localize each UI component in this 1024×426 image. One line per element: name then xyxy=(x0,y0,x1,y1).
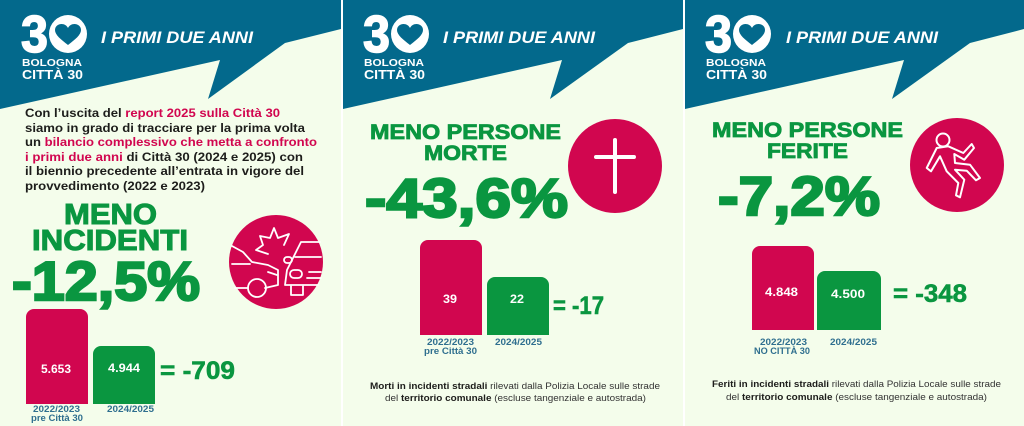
bar chart: 4.848 xyxy=(765,287,799,299)
bar chart: 2022/2023 xyxy=(760,337,807,348)
icon: cross xyxy=(568,119,662,213)
icon: car crash xyxy=(229,215,323,309)
logo: Bologna Città 30: CITTÀ 30 xyxy=(364,67,425,82)
banner title: I PRIMI DUE ANNI xyxy=(101,29,253,47)
logo: Bologna Città 30 xyxy=(363,6,429,82)
logo: Bologna Città 30 xyxy=(21,6,87,82)
panel: meno persone ferite xyxy=(685,0,1024,426)
bar chart: 22 xyxy=(510,292,524,306)
intro text xyxy=(25,106,317,193)
intro text: provvedimento (2022 e 2023) xyxy=(25,179,205,193)
percentage: -12,5% xyxy=(12,250,200,312)
bar chart: 2022/2023 xyxy=(33,404,80,415)
logo: Bologna Città 30: BOLOGNA xyxy=(22,57,82,69)
bar chart: 4.500 xyxy=(831,289,865,301)
bar chart: 2024/2025 xyxy=(495,337,543,348)
bar chart: 4.944 xyxy=(108,363,141,375)
difference: = -709 xyxy=(160,357,235,385)
header banner xyxy=(0,0,341,109)
difference: = -17 xyxy=(553,292,604,320)
panel: meno persone morte xyxy=(343,0,683,426)
footnote xyxy=(712,379,1001,402)
banner title: I PRIMI DUE ANNI xyxy=(443,29,595,47)
heading xyxy=(712,119,903,163)
banner title: I PRIMI DUE ANNI xyxy=(786,29,938,47)
panel: meno incidenti xyxy=(0,0,341,426)
bar chart xyxy=(420,240,549,357)
percentage: -7,2% xyxy=(718,165,880,227)
heading: FERITE xyxy=(767,140,848,163)
heading: INCIDENTI xyxy=(32,225,188,257)
footnote: del territorio comunale (escluse tangenziale e autostrada) xyxy=(726,392,987,402)
logo: Bologna Città 30: BOLOGNA xyxy=(364,57,424,69)
footnote: del territorio comunale (escluse tangenziale e autostrada) xyxy=(385,393,646,403)
intro text: siamo in grado di tracciare per la prima volta xyxy=(25,121,305,135)
bar chart xyxy=(752,246,881,357)
footnote: Feriti in incidenti stradali rilevati dalla Polizia Locale sulle strade xyxy=(712,379,1001,389)
heading: MENO xyxy=(64,199,157,231)
intro text: un bilancio complessivo che metta a confronto xyxy=(25,135,317,149)
intro text: i primi due anni di Città 30 (2024 e 2025) con xyxy=(25,150,303,164)
heading: MORTE xyxy=(424,142,507,165)
bar chart xyxy=(26,309,155,424)
footnote xyxy=(370,381,660,403)
icon: falling person xyxy=(910,118,1004,212)
logo: Bologna Città 30 xyxy=(705,6,771,82)
header banner xyxy=(343,0,683,109)
bar chart: NO CITTÀ 30 xyxy=(754,346,810,357)
bar chart: 2024/2025 xyxy=(830,337,878,348)
logo: Bologna Città 30: CITTÀ 30 xyxy=(22,67,83,82)
logo: Bologna Città 30: 3 xyxy=(363,6,390,64)
intro text: il biennio precedente all’entrata in vigore del xyxy=(25,164,304,178)
bar chart: pre Città 30 xyxy=(31,413,83,424)
heading: MENO PERSONE xyxy=(712,119,903,142)
percentage: -43,6% xyxy=(365,167,568,229)
heading: MENO PERSONE xyxy=(370,121,561,144)
logo: Bologna Città 30: 3 xyxy=(21,6,48,64)
header banner xyxy=(685,0,1024,109)
footnote: Morti in incidenti stradali rilevati dalla Polizia Locale sulle strade xyxy=(370,381,660,391)
intro text: Con l’uscita del report 2025 sulla Città 30 xyxy=(25,106,280,120)
bar chart: pre Città 30 xyxy=(424,346,477,357)
bar chart: 5.653 xyxy=(41,364,71,376)
logo: Bologna Città 30: 3 xyxy=(705,6,732,64)
bar chart: 2022/2023 xyxy=(427,337,474,348)
difference: = -348 xyxy=(893,280,967,308)
bar chart: 2024/2025 xyxy=(107,404,155,415)
heading xyxy=(32,199,188,257)
heading xyxy=(370,121,561,165)
logo: Bologna Città 30: BOLOGNA xyxy=(706,57,766,69)
logo: Bologna Città 30: CITTÀ 30 xyxy=(706,67,767,82)
bar chart: 39 xyxy=(443,292,457,306)
